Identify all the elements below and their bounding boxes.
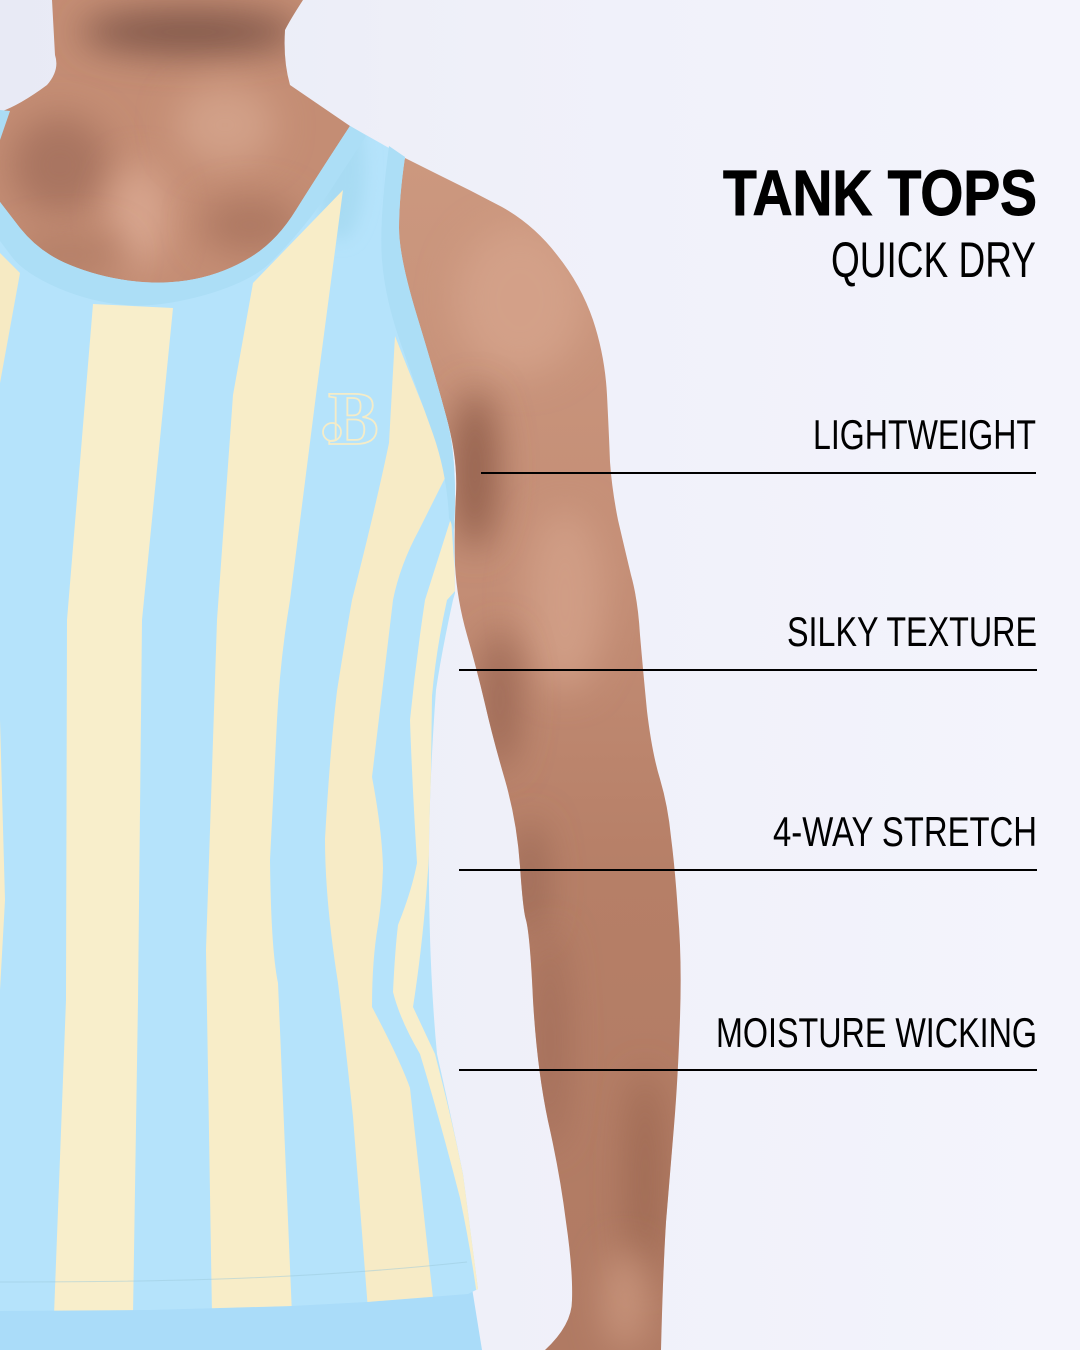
model figure [0, 0, 700, 1350]
title: TANK TOPS [723, 157, 1037, 229]
armhole trim [381, 146, 455, 530]
shading on fabric [314, 126, 362, 234]
monogram letter: B [328, 377, 379, 461]
hem stitching [0, 1262, 467, 1282]
logo [323, 377, 379, 461]
yellow stripes [0, 190, 480, 1315]
left strap [0, 110, 10, 140]
monogram curl [323, 423, 341, 441]
shorts [0, 1288, 482, 1350]
tank base colour [0, 110, 480, 1320]
arm and shoulder [399, 158, 681, 1350]
neck and chest [0, 0, 351, 282]
neck trim [0, 126, 366, 306]
tank top [0, 100, 480, 1320]
